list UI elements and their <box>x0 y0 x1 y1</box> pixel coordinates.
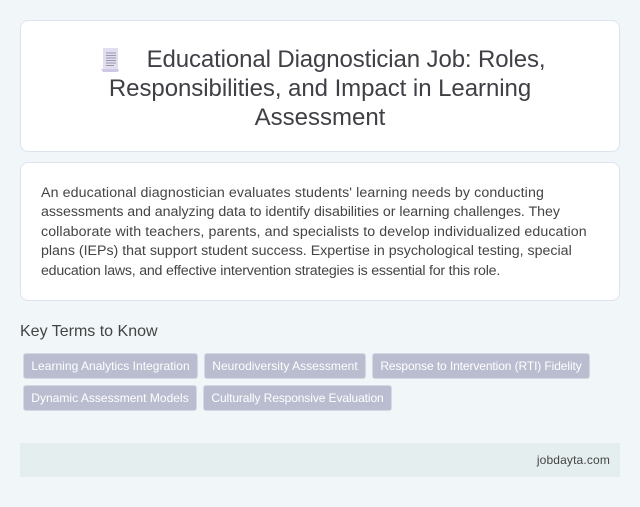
footer text: jobdayta.com <box>537 453 610 467</box>
text block: description: plans (IEPs) that support student success. Expertise in psychological testing, special <box>41 243 572 259</box>
footer bar <box>20 443 620 477</box>
tag: Neurodiversity Assessment: Neurodiversity Assessment <box>212 359 358 373</box>
tag: Response to Intervention (RTI) Fidelity: Response to Intervention (RTI) Fidelity <box>380 359 582 373</box>
title: Responsibilities, and Impact in Learning <box>109 75 531 102</box>
tag: Dynamic Assessment Models: Dynamic Assessment Models <box>31 391 189 405</box>
tag: Response to Intervention (RTI) Fidelity <box>372 353 590 379</box>
title: Assessment <box>255 104 385 131</box>
tag: Dynamic Assessment Models <box>23 385 197 411</box>
tag: Culturally Responsive Evaluation: Culturally Responsive Evaluation <box>211 391 384 405</box>
panel: description <box>20 162 620 301</box>
heading: key terms: Key Terms to Know <box>20 323 158 340</box>
text block: description: assessments and analyzing data to identify disabilities or learning challenges. They <box>41 204 560 220</box>
text block: description <box>41 185 587 279</box>
title <box>109 46 545 131</box>
tag: Neurodiversity Assessment <box>204 353 366 379</box>
title: Educational Diagnostician Job: Roles, <box>147 46 545 73</box>
text block: description: An educational diagnostician evaluates students' learning needs by conducting <box>41 185 544 201</box>
icon: document scroll <box>101 48 119 72</box>
text block: description: collaborate with teachers, parents, and specialists to develop individualized education <box>41 224 587 240</box>
panel: title card <box>20 20 620 152</box>
tag: Culturally Responsive Evaluation <box>203 385 392 411</box>
tag: Learning Analytics Integration: Learning Analytics Integration <box>31 359 190 373</box>
tag: Learning Analytics Integration <box>23 353 198 379</box>
panel: description: education laws, and effective intervention strategies is essential for this role. <box>41 263 500 279</box>
